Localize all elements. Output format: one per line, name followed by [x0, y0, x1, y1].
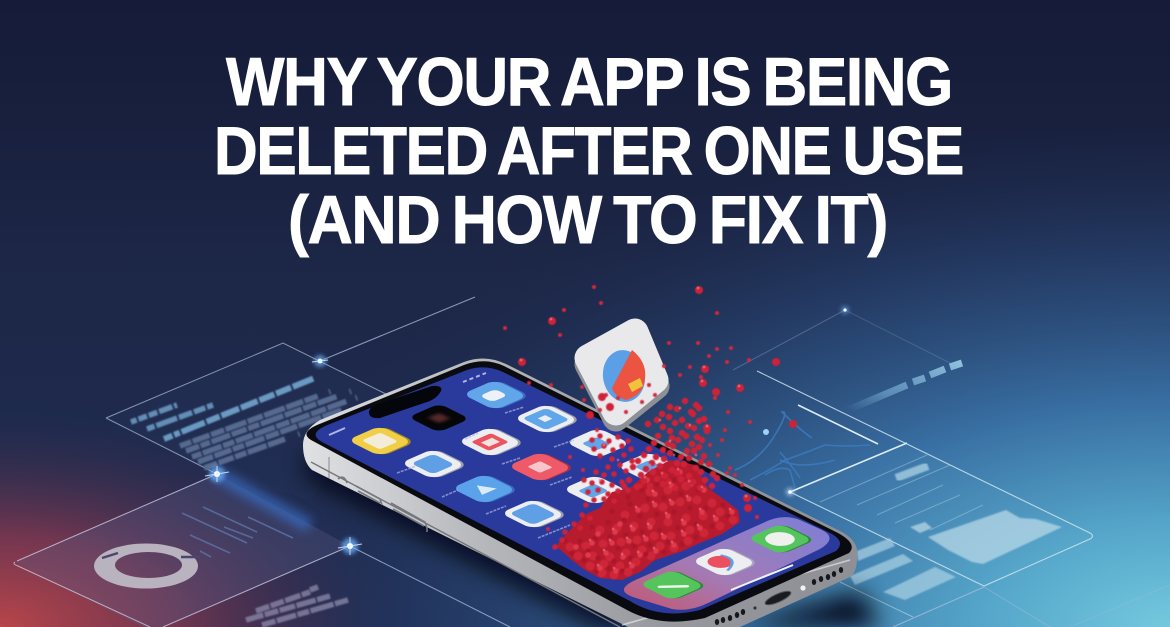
- sparkles: [205, 306, 849, 555]
- larger scatter particles: [522, 290, 793, 508]
- small scatter particles: [505, 287, 757, 529]
- particle mass base: [556, 460, 740, 580]
- card lines: [820, 455, 983, 530]
- upper plume particles: [624, 401, 717, 488]
- icon: black photo: [408, 404, 470, 432]
- flying app icon: [588, 332, 656, 418]
- title: DELETED AFTER ONE USE: [214, 113, 963, 189]
- phone body: [303, 358, 857, 627]
- icon face: [588, 332, 655, 412]
- lower bars: [850, 538, 956, 600]
- pie chart: [600, 347, 648, 405]
- icon: yellow note: [347, 425, 415, 457]
- side buttons: [329, 457, 427, 532]
- icon: white with blue letter: [513, 403, 581, 435]
- icon: white compass: [691, 546, 759, 578]
- grey data grid bottom left: [246, 587, 348, 625]
- sparkle rays: [205, 360, 362, 555]
- fading blue bars: [848, 363, 962, 410]
- phone screen: [316, 367, 840, 613]
- notch: [369, 386, 441, 418]
- icon: green message: [747, 523, 815, 555]
- left stream particles: [555, 436, 640, 547]
- donut chart: [94, 544, 200, 588]
- icon: partly dissolved white: [565, 428, 631, 458]
- app icon grid: [347, 379, 682, 538]
- icon: coral: [507, 451, 575, 483]
- icon thickness: [588, 338, 656, 418]
- icon: white with red: [457, 426, 525, 458]
- icon: white with blue lower: [500, 498, 568, 530]
- chart legend lines: [182, 507, 293, 557]
- panel: right dashboard card: [757, 363, 1093, 617]
- light blue header bars: [131, 377, 317, 439]
- status marks: [329, 373, 486, 435]
- grey data grid in top left card: [180, 388, 364, 468]
- phone: [303, 358, 857, 627]
- connector lines: [320, 297, 1170, 627]
- sparkle nodes: [209, 306, 849, 554]
- map lines: [735, 412, 870, 488]
- bright pebbles: [576, 472, 732, 571]
- title: (AND HOW TO FIX IT): [288, 182, 887, 258]
- histogram: [910, 510, 1062, 564]
- particle highlights: [590, 408, 730, 568]
- icon: green phone: [639, 569, 707, 601]
- icon: blue: [451, 473, 519, 505]
- app labels: [397, 407, 574, 538]
- bottom ports: [715, 567, 843, 625]
- title: WHY YOUR APP IS BEING: [226, 44, 952, 120]
- red particles: [505, 287, 793, 575]
- icon: dissolved right: [616, 452, 682, 482]
- lower mass mid pebbles: [565, 476, 728, 572]
- icon: white with blue: [400, 448, 468, 480]
- phone bezel: [306, 361, 852, 622]
- panel: donut chart card: [14, 474, 350, 627]
- phone shadow: [306, 450, 880, 627]
- blue glow line from node: [217, 474, 310, 526]
- panel: top left table card: [106, 343, 392, 500]
- lower mass pebbles: [570, 486, 733, 575]
- icon: light blue cloud: [462, 379, 530, 411]
- dock: [624, 517, 830, 610]
- title: [214, 44, 963, 258]
- icon: partly dissolved white lower: [562, 475, 628, 505]
